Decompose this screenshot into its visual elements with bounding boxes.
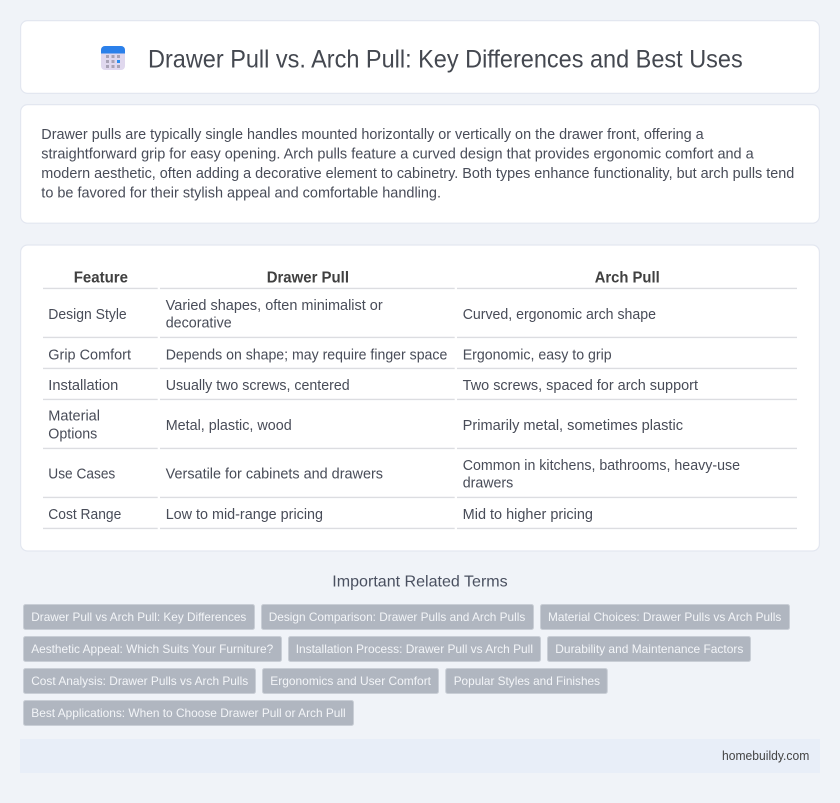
table row: installation: Two screws, spaced for arch support (463, 378, 698, 394)
title: Drawer Pull vs. Arch Pull: Key Differences and Best Uses (148, 45, 743, 73)
table row: design style: decorative (166, 316, 232, 332)
tag: Durability and Maintenance Factors (555, 642, 743, 656)
table row: cost range: Low to mid-range pricing (166, 507, 323, 523)
tag: Ergonomics and User Comfort (270, 674, 432, 688)
tag (540, 604, 790, 630)
tag (288, 636, 540, 662)
tag (548, 636, 750, 662)
table row: use cases: Use Cases (48, 467, 115, 483)
tag: Installation Process: Drawer Pull vs Arch Pull (296, 642, 533, 656)
table row: material options: Primarily metal, sometimes plastic (463, 418, 683, 434)
tag (446, 668, 607, 694)
tag: Drawer Pull vs Arch Pull: Key Differences (31, 610, 246, 624)
table row: material options: Options (48, 427, 97, 443)
table row: cost range (48, 507, 593, 523)
table row: design style: Design Style (48, 307, 127, 323)
table header row: Feature (74, 270, 128, 287)
tag (24, 636, 282, 662)
table row: cost range: Cost Range (48, 507, 121, 523)
table row: grip comfort: Ergonomic, easy to grip (463, 347, 612, 363)
tag (24, 668, 256, 694)
heading: related terms: Important Related Terms (332, 574, 508, 591)
tag: Aesthetic Appeal: Which Suits Your Furniture? (31, 642, 274, 656)
footer source text: homebuildy.com (722, 748, 809, 763)
table row: use cases: Common in kitchens, bathrooms, heavy-use (463, 458, 740, 474)
panel: header (21, 21, 819, 93)
table row: material options (48, 409, 683, 443)
text block: introduction paragraph (41, 127, 794, 201)
table row: material options: Metal, plastic, wood (166, 418, 292, 434)
table row: installation (48, 378, 698, 394)
table row: installation: Usually two screws, centered (166, 378, 350, 394)
tag: Material Choices: Drawer Pulls vs Arch Pulls (548, 610, 781, 624)
text block: introduction paragraph: to be favored for their stylish appeal and comfortable handling. (41, 185, 441, 201)
panel: comparison table (21, 245, 819, 551)
panel: introduction text (21, 105, 819, 223)
tag (262, 668, 438, 694)
table row: use cases: drawers (463, 476, 513, 492)
table row: use cases (48, 458, 740, 492)
table header row: Arch Pull (595, 270, 660, 287)
table row: grip comfort: Depends on shape; may require finger space (166, 347, 447, 363)
table row: material options: Material (48, 409, 100, 425)
related terms tags (24, 604, 790, 726)
footer (20, 739, 820, 773)
table row: grip comfort: Grip Comfort (48, 347, 131, 363)
tag (24, 700, 354, 726)
tag (262, 604, 534, 630)
text block: introduction paragraph: Drawer pulls are typically single handles mounted horizontally or vertically on the drawer front, offering a (41, 127, 704, 143)
tag: Popular Styles and Finishes (454, 674, 600, 688)
table header row (74, 270, 660, 287)
table row: use cases: Versatile for cabinets and drawers (166, 467, 383, 483)
tag: Cost Analysis: Drawer Pulls vs Arch Pulls (31, 674, 248, 688)
icon: calendar grid (101, 46, 125, 70)
tag: Best Applications: When to Choose Drawer Pull or Arch Pull (31, 706, 346, 720)
text block: introduction paragraph: straightforward grip for easy opening. Arch pulls feature a curved design that provides ergonomic comfort and a (41, 146, 754, 162)
table header row: Drawer Pull (267, 270, 349, 287)
table row: cost range: Mid to higher pricing (463, 507, 593, 523)
tag (24, 604, 254, 630)
table row: grip comfort (48, 347, 612, 363)
tag: Design Comparison: Drawer Pulls and Arch Pulls (269, 610, 525, 624)
table row: installation: Installation (48, 378, 118, 394)
table row: design style: Curved, ergonomic arch shape (463, 307, 656, 323)
table row: design style (48, 298, 656, 332)
text block: introduction paragraph: modern aesthetic, often adding a decorative element to cabinetry. Both types enhance functionality, but arch pulls tend (41, 166, 794, 182)
table row: design style: Varied shapes, often minimalist or (166, 298, 383, 314)
